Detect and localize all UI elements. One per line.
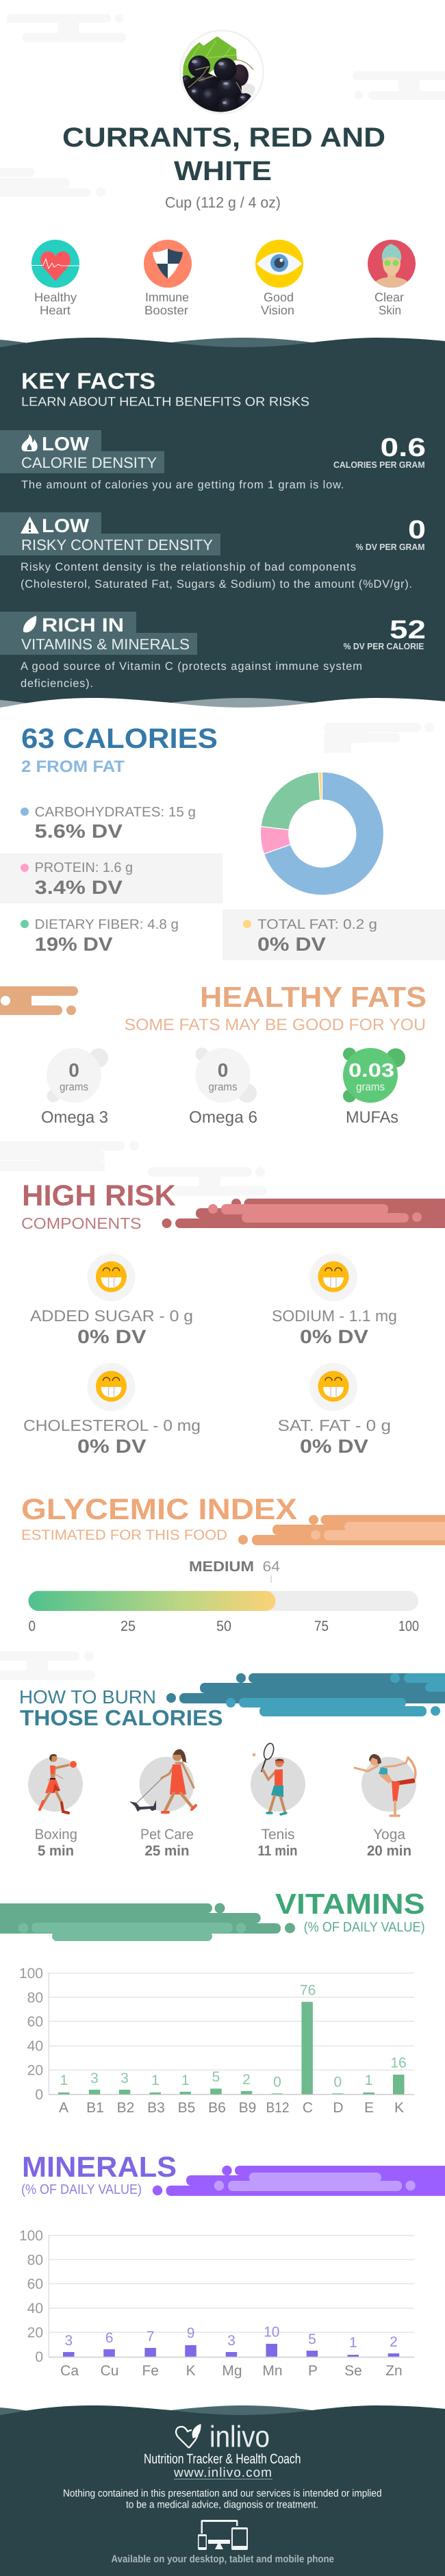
bar chart: vitamins: 3	[90, 2071, 99, 2086]
bar chart: minerals: Fe	[142, 2363, 159, 2379]
stat: omega 6: grams	[208, 1081, 237, 1093]
bar chart: vitamins: B1	[86, 2100, 104, 2116]
description: The amount of calories you are getting from 1 gram is low.	[21, 479, 344, 491]
gauge scale: 50	[216, 1618, 231, 1634]
bar chart: vitamins: 2	[242, 2072, 251, 2088]
legend: total fat: 0% DV	[257, 934, 326, 955]
panel: key facts	[0, 338, 445, 708]
tagline: Nutrition Tracker & Health Coach	[144, 2452, 301, 2467]
component: cholesterol	[23, 1363, 201, 1457]
activity: yoga	[355, 1754, 416, 1859]
subheading: from fat: 2 FROM FAT	[21, 758, 125, 776]
availability note: Available on your desktop, tablet and mobile phone	[111, 2553, 334, 2565]
stat: mufas	[343, 1048, 405, 1127]
activity: tennis	[251, 1742, 305, 1859]
activity: tennis: 11 min	[257, 1843, 297, 1859]
bar chart: minerals	[19, 2228, 414, 2379]
name: VITAMINS & MINERALS	[21, 636, 190, 653]
heading: minerals: MINERALS	[22, 2151, 177, 2183]
fact: rich in vitamins and minerals	[0, 612, 426, 690]
rating: rich in: RICH IN	[42, 614, 124, 636]
bar chart: minerals: 5	[308, 2331, 316, 2347]
subheading: (% OF DAILY VALUE)	[21, 2182, 142, 2197]
bar chart: minerals: 80	[27, 2252, 43, 2268]
description: Risky Content density is the relationship of bad components	[21, 561, 356, 573]
subheading: components: COMPONENTS	[21, 1214, 141, 1232]
icon: flame	[22, 434, 38, 451]
bar chart: vitamins: 80	[27, 1990, 43, 2005]
bar chart: vitamins: 40	[27, 2038, 43, 2054]
heading: high risk: HIGH RISK	[22, 1179, 176, 1212]
heading: THOSE CALORIES	[20, 1705, 223, 1730]
bar chart: vitamins: B2	[117, 2100, 134, 2116]
figure: dog walker	[129, 1749, 196, 1812]
panel: minerals	[19, 2151, 445, 2379]
legend: protein	[21, 860, 133, 898]
bar chart: vitamins: 60	[27, 2014, 43, 2030]
bar chart: minerals: 100	[19, 2228, 43, 2244]
legend: dietary fiber	[21, 917, 179, 955]
donut chart	[260, 772, 383, 895]
label: clear skin: Clear	[374, 290, 404, 304]
description: deficiencies).	[21, 677, 93, 690]
stat: omega 3: Omega 3	[41, 1108, 108, 1127]
bar chart: minerals: Mg	[222, 2363, 242, 2379]
legend: total fat	[243, 917, 377, 955]
gauge scale: 25	[120, 1618, 136, 1634]
gauge scale	[29, 1618, 419, 1634]
panel: vitamins	[0, 1888, 425, 2116]
label: clear skin: Skin	[379, 303, 401, 317]
header: food portrait	[181, 30, 263, 116]
stat: mufas: grams	[356, 1081, 385, 1093]
icon: leaf	[23, 616, 36, 632]
bar chart: vitamins: K	[394, 2100, 404, 2116]
bar chart: vitamins: 1	[181, 2073, 190, 2088]
component: saturated fat	[278, 1363, 391, 1457]
heading: calories: 63 CALORIES	[21, 723, 218, 754]
name: CALORIE DENSITY	[21, 454, 157, 471]
legend: protein: PROTEIN: 1.6 g	[35, 860, 133, 875]
component: sodium: SODIUM - 1.1 mg	[272, 1307, 397, 1325]
panel: high risk components	[21, 1179, 445, 1457]
label: clear skin	[374, 290, 404, 317]
stat: mufas: 0.03	[348, 1060, 394, 1081]
disclaimer: Nothing contained in this presentation and our services is intended or implied	[63, 2488, 382, 2499]
bar chart: minerals: Cu	[101, 2363, 118, 2379]
icon: immune booster	[144, 240, 192, 288]
label: good vision: Vision	[261, 303, 294, 317]
heading: healthy fats: HEALTHY FATS	[200, 981, 427, 1013]
stat: omega 6: 0	[218, 1060, 228, 1081]
bar chart: minerals: 6	[105, 2330, 113, 2346]
bar chart: vitamins: 0	[334, 2075, 342, 2090]
component: added sugar	[30, 1253, 193, 1347]
label: good vision: Good	[264, 290, 294, 304]
bar chart: vitamins: B9	[239, 2100, 256, 2116]
bar chart: vitamins: B3	[147, 2100, 165, 2116]
label: good vision	[261, 290, 294, 317]
disclaimer	[63, 2488, 382, 2511]
disclaimer: to be a medical advice, diagnosis or treatment.	[126, 2499, 318, 2511]
bar chart: vitamins: B5	[178, 2100, 195, 2116]
gauge scale: 0	[29, 1618, 36, 1634]
label: healthy heart	[34, 290, 77, 317]
bar chart: vitamins: B6	[208, 2100, 226, 2116]
activity: boxing: 5 min	[38, 1843, 74, 1859]
subheading: LEARN ABOUT HEALTH BENEFITS OR RISKS	[21, 395, 309, 408]
activity: pet care	[129, 1749, 196, 1859]
gauge bar	[29, 1591, 418, 1611]
component: cholesterol: 0% DV	[77, 1436, 147, 1457]
figure: boxer	[40, 1754, 77, 1813]
bar chart: vitamins: 16	[390, 2055, 407, 2071]
description	[21, 561, 412, 590]
title: WHITE	[174, 156, 272, 186]
bar chart: minerals: 20	[27, 2325, 43, 2341]
bar chart: vitamins: B12	[266, 2100, 289, 2116]
activity: yoga: Yoga	[373, 1827, 405, 1842]
bar chart: vitamins: 20	[27, 2063, 43, 2078]
component: saturated fat: 0% DV	[300, 1436, 368, 1457]
activity: yoga: 20 min	[367, 1843, 411, 1859]
description	[21, 660, 362, 690]
bar chart: vitamins: 1	[365, 2073, 372, 2088]
bar chart: minerals: Zn	[385, 2363, 403, 2379]
serving size: Cup (112 g / 4 oz)	[165, 194, 281, 211]
component: sodium: 0% DV	[300, 1326, 368, 1347]
stat: omega 6	[189, 1048, 257, 1127]
name: RISKY CONTENT DENSITY	[21, 536, 213, 553]
bar chart: minerals: Mn	[262, 2363, 283, 2379]
activity: tennis: Tenis	[262, 1827, 294, 1842]
unit: % DV PER GRAM	[356, 542, 424, 552]
label: healthy heart: Healthy	[34, 290, 77, 304]
activity: pet care: Pet Care	[140, 1827, 194, 1842]
unit: % DV PER CALORIE	[344, 641, 424, 651]
gauge scale: 75	[314, 1618, 329, 1634]
bar chart: minerals: 3	[64, 2333, 73, 2349]
rating label: 64	[263, 1559, 280, 1575]
panel: calories	[0, 723, 445, 960]
heading: HOW TO BURN	[19, 1686, 156, 1708]
legend: protein: 3.4% DV	[35, 877, 123, 898]
fact: calorie density	[0, 430, 426, 491]
rating label: MEDIUM	[189, 1559, 254, 1575]
legend band: total fat	[222, 910, 445, 960]
component: added sugar: 0% DV	[77, 1326, 147, 1347]
bar chart: minerals: Ca	[60, 2363, 79, 2379]
bar chart: minerals: 7	[147, 2329, 155, 2344]
figure: yoga pose	[355, 1754, 416, 1816]
icon: warning	[21, 516, 39, 534]
bar chart: vitamins: 1	[60, 2073, 68, 2088]
bar chart: vitamins: 76	[300, 1983, 316, 1999]
description: (Cholesterol, Saturated Fat, Sugars & Sodium) to the amount (%DV/gr).	[21, 578, 412, 590]
stat: omega 3: grams	[60, 1081, 88, 1093]
legend: carbohydrates: 5.6% DV	[35, 821, 123, 842]
gauge scale: 100	[398, 1618, 419, 1634]
component: sodium	[272, 1253, 397, 1347]
legend: carbohydrates	[21, 805, 196, 842]
icon: healthy heart	[31, 240, 79, 288]
value: 0.6	[381, 434, 426, 462]
rating: low: LOW	[42, 433, 90, 455]
value: 52	[390, 616, 426, 645]
value: 0	[408, 516, 426, 545]
legend: dietary fiber: 19% DV	[35, 934, 113, 955]
rating: low: LOW	[42, 515, 90, 536]
logo: inlivo	[176, 2421, 270, 2454]
label: healthy heart: Heart	[40, 303, 71, 317]
bar chart: minerals: 1	[349, 2335, 357, 2351]
bar chart: minerals: 3	[227, 2333, 236, 2349]
bar chart: vitamins: D	[333, 2100, 344, 2116]
heading: key facts: KEY FACTS	[21, 368, 155, 393]
bar chart: minerals: 2	[390, 2334, 398, 2350]
legend: dietary fiber: DIETARY FIBER: 4.8 g	[35, 917, 179, 932]
bar chart: vitamins: 3	[120, 2071, 129, 2086]
legend band: protein	[0, 853, 223, 903]
bar chart: vitamins: A	[59, 2100, 68, 2116]
bar chart: minerals: 40	[27, 2301, 43, 2316]
unit: CALORIES PER GRAM	[333, 460, 425, 470]
panel: footer	[0, 2405, 445, 2576]
panel: healthy fats	[0, 981, 427, 1127]
subheading: ESTIMATED FOR THIS FOOD	[21, 1527, 227, 1543]
component: saturated fat: SAT. FAT - 0 g	[278, 1416, 391, 1434]
icon: clear skin	[368, 240, 416, 288]
icon: devices	[198, 2520, 248, 2550]
bar chart: minerals: 60	[27, 2277, 43, 2292]
label: immune booster: Booster	[144, 303, 188, 317]
logo: inlivo: inlivo	[209, 2421, 270, 2454]
label: immune booster: Immune	[145, 290, 189, 304]
heading: glycemic index: GLYCEMIC INDEX	[21, 1493, 297, 1526]
stat: mufas: MUFAs	[346, 1108, 398, 1127]
icon: good vision	[255, 240, 303, 288]
stat: omega 3	[41, 1048, 108, 1127]
bar chart: vitamins: E	[364, 2100, 374, 2116]
bar chart: vitamins: 5	[212, 2069, 220, 2085]
rating label	[189, 1559, 280, 1583]
bar chart: vitamins: 100	[19, 1966, 43, 1981]
bar chart: minerals: P	[308, 2363, 318, 2379]
title: CURRANTS, RED AND	[62, 123, 385, 153]
description: A good source of Vitamin C (protects against immune system	[21, 660, 362, 673]
bar chart: vitamins: 0	[35, 2087, 43, 2103]
bar chart: vitamins: C	[303, 2100, 313, 2116]
stat: omega 6: Omega 6	[189, 1108, 257, 1127]
panel: how to burn those calories	[19, 1673, 445, 1859]
component: cholesterol: CHOLESTEROL - 0 mg	[23, 1416, 201, 1434]
heading	[19, 1686, 223, 1730]
bar chart: minerals: 10	[264, 2325, 279, 2340]
bar chart: minerals: 9	[187, 2325, 194, 2341]
bar chart: minerals: Se	[344, 2363, 362, 2379]
panel: glycemic index	[21, 1493, 445, 1634]
activity: boxing	[28, 1754, 83, 1859]
fact: risky content density	[0, 512, 426, 590]
website link: www.inlivo.com	[173, 2466, 272, 2480]
legend: carbohydrates: CARBOHYDRATES: 15 g	[35, 805, 196, 820]
heading: vitamins: VITAMINS	[275, 1888, 425, 1920]
subheading: SOME FATS MAY BE GOOD FOR YOU	[125, 1016, 426, 1034]
bar chart: vitamins: 1	[151, 2073, 160, 2088]
bar chart: vitamins: 0	[273, 2075, 281, 2090]
bar chart: minerals: 0	[35, 2349, 43, 2365]
activity: pet care: 25 min	[145, 1843, 189, 1859]
legend: total fat: TOTAL FAT: 0.2 g	[257, 917, 377, 932]
label: immune booster	[144, 290, 189, 317]
figure: tennis player	[252, 1742, 286, 1814]
bar chart: minerals: K	[186, 2363, 196, 2379]
title	[62, 123, 385, 186]
component: added sugar: ADDED SUGAR - 0 g	[30, 1307, 193, 1325]
stat: omega 3: 0	[68, 1060, 79, 1081]
activity: boxing: Boxing	[35, 1827, 77, 1842]
subheading: (% OF DAILY VALUE)	[304, 1920, 425, 1935]
bar chart: vitamins	[19, 1966, 414, 2116]
